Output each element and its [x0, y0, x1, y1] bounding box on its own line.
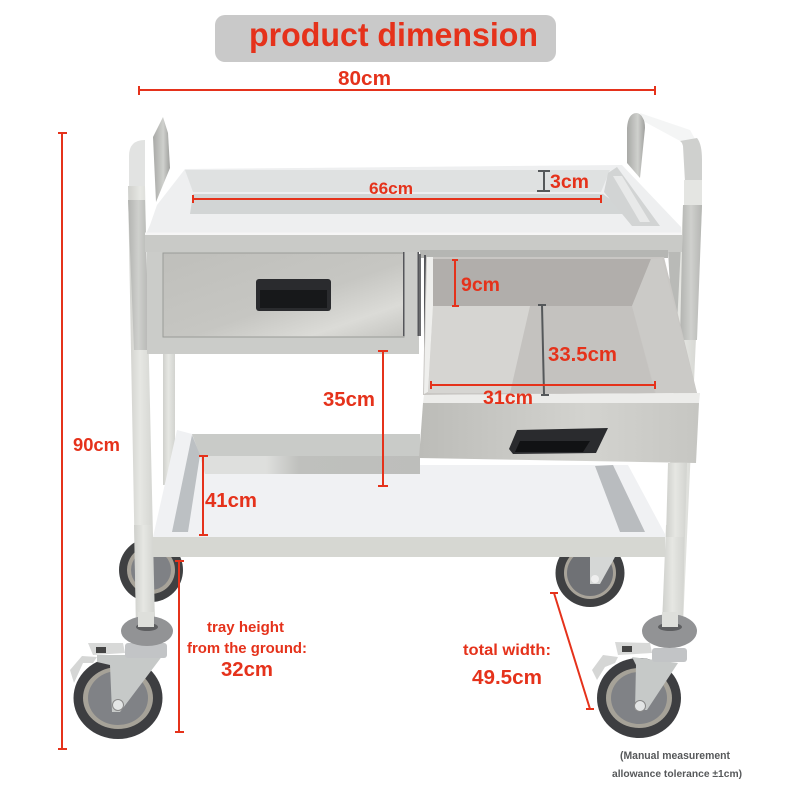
- measurement tolerance note: (Manual measurement: [620, 750, 730, 762]
- rear casters: [119, 538, 624, 607]
- measurement tolerance note: [612, 750, 742, 780]
- front right caster: [592, 612, 697, 738]
- title banner: [215, 15, 556, 62]
- dimension: drawer width 31cm: [431, 381, 655, 409]
- open drawer: [419, 250, 700, 463]
- dimension: overall length 80cm: 80cm: [338, 68, 391, 90]
- dimension: tray length 66cm: 66cm: [369, 179, 413, 198]
- dimension: lower tray 41cm: [199, 456, 257, 535]
- dimension: shelf gap 35cm: 35cm: [323, 389, 375, 411]
- dimension: overall length 80cm: [139, 68, 655, 95]
- dimension: overall height 90cm: [58, 133, 120, 749]
- dimension: drawer depth 9cm: [452, 260, 500, 306]
- dimension: tray length 66cm: [193, 179, 601, 203]
- dimension: drawer depth 9cm: 9cm: [461, 274, 500, 296]
- front left caster: [70, 612, 173, 739]
- measurement tolerance note: allowance tolerance ±1cm): [612, 768, 742, 780]
- dimension: overall height 90cm: 90cm: [73, 434, 120, 455]
- open drawer handle: [509, 428, 608, 454]
- dimension: total width 49.5cm: 49.5cm: [472, 667, 542, 689]
- dimension: drawer length 33.5cm: 33.5cm: [548, 344, 617, 366]
- rear posts and back handles: [153, 113, 695, 485]
- front posts: [128, 138, 702, 625]
- lower tray: [134, 430, 687, 625]
- dimension: drawer width 31cm: 31cm: [483, 387, 533, 409]
- dimension: total width 49.5cm: total width:: [463, 642, 551, 659]
- dimension: drawer length 33.5cm: [538, 305, 617, 395]
- dimension: tray height from ground: from the ground:: [187, 640, 307, 657]
- dimension: lower tray 41cm: 41cm: [205, 490, 257, 512]
- dimension: total width 49.5cm: [463, 593, 594, 709]
- drawer handle: [256, 279, 331, 311]
- dimension: tray height from ground: [175, 561, 307, 732]
- dimension: shelf gap 35cm: [323, 351, 388, 486]
- trolley: [70, 113, 702, 739]
- dimension: tray height from ground: tray height: [207, 619, 284, 636]
- dimension: tray height from ground: 32cm: [221, 659, 273, 681]
- closed drawer: [147, 252, 419, 354]
- dimension: tray depth 3cm: 3cm: [550, 171, 589, 193]
- top tray: [145, 165, 682, 252]
- title banner: product dimension: [249, 16, 538, 53]
